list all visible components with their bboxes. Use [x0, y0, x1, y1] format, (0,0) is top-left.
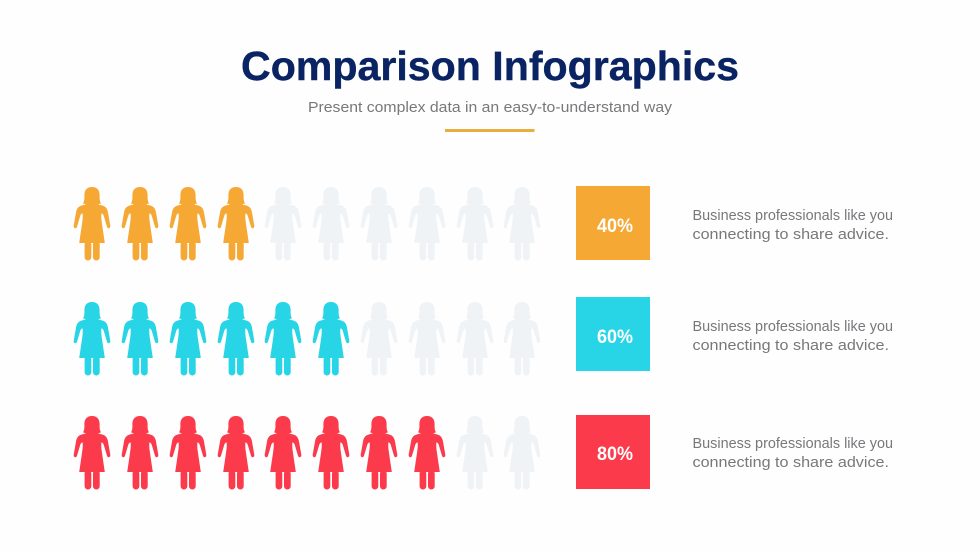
percentage box: 80%: 80%	[597, 444, 633, 465]
description: Business professionals like you	[692, 208, 893, 224]
pictogram: 4 of 10 people	[74, 187, 540, 260]
title underline	[445, 129, 534, 132]
pictogram: 8 of 10 people	[74, 416, 540, 490]
description: connecting to share advice.	[692, 455, 889, 471]
percentage box: 40%	[576, 186, 650, 260]
subtitle: Present complex data in an easy-to-understand way	[308, 100, 673, 116]
description: connecting to share advice.	[692, 338, 889, 354]
title: Comparison Infographics	[241, 43, 739, 89]
row 1: 40%	[74, 186, 893, 260]
row 3: 80%	[74, 415, 893, 490]
description	[692, 208, 893, 243]
pictogram: 6 of 10 people	[74, 302, 540, 376]
description: Business professionals like you	[692, 319, 893, 335]
percentage box: 80%	[576, 415, 650, 489]
description: connecting to share advice.	[692, 227, 889, 243]
row 2: 60%	[74, 297, 893, 376]
percentage box: 40%: 40%	[597, 216, 633, 237]
percentage box: 60%	[576, 297, 650, 371]
percentage box: 60%: 60%	[597, 327, 633, 348]
description	[692, 436, 893, 471]
description: Business professionals like you	[692, 436, 893, 452]
description	[692, 319, 893, 354]
